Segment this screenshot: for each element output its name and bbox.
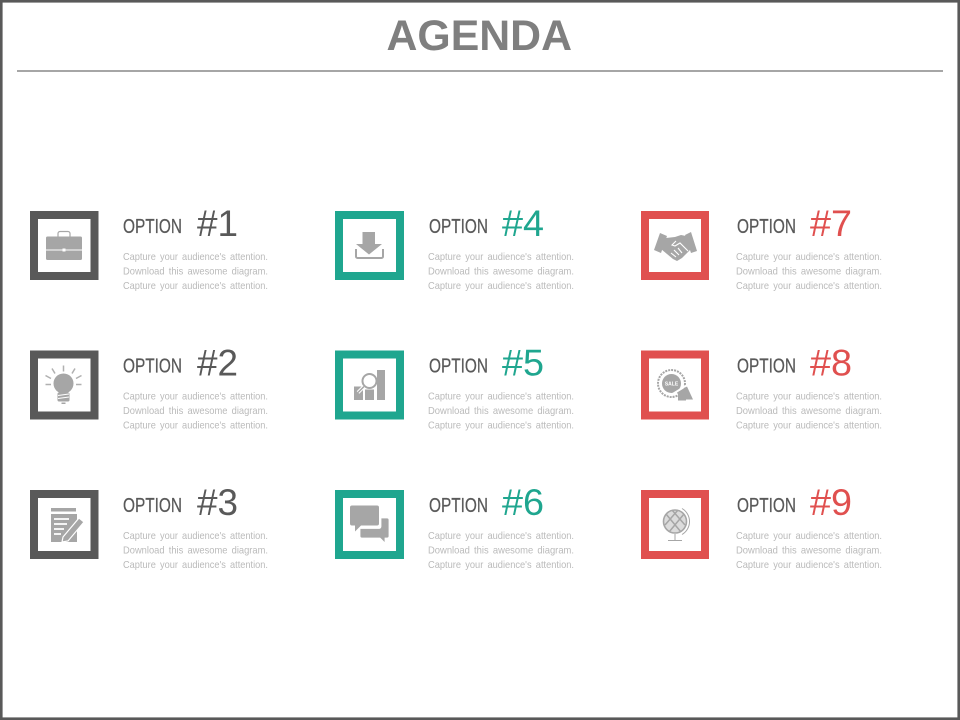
option 1 text: OPTION bbox=[123, 216, 182, 238]
option 8 text: Capture your audience's attention. bbox=[736, 390, 882, 402]
title: AGENDA bbox=[386, 12, 572, 60]
icon: briefcase bbox=[34, 215, 94, 276]
icon: light bulb bbox=[34, 354, 94, 416]
option 4 bbox=[339, 203, 574, 292]
option 7 bbox=[645, 203, 882, 292]
icon: sale badge and hand: SALE bbox=[665, 382, 679, 388]
option 8 text: OPTION bbox=[737, 356, 796, 378]
option 9 text: Download this awesome diagram. bbox=[736, 544, 882, 556]
option 3 text: OPTION bbox=[123, 495, 182, 517]
option 2 bbox=[34, 342, 268, 432]
option 7 text: Download this awesome diagram. bbox=[736, 266, 882, 278]
option 3 text: #3 bbox=[197, 482, 238, 523]
option 6 text bbox=[428, 482, 574, 571]
option 4 text: OPTION bbox=[429, 216, 488, 238]
option 5 text: Download this awesome diagram. bbox=[428, 405, 574, 417]
option 9 text bbox=[736, 482, 882, 571]
option 2 text: OPTION bbox=[123, 356, 182, 378]
option 1 text: Capture your audience's attention. bbox=[123, 280, 268, 292]
option 6 text: Capture your audience's attention. bbox=[428, 559, 574, 571]
option 4 text: #4 bbox=[502, 203, 544, 244]
option 3 text: Capture your audience's attention. bbox=[123, 559, 268, 571]
option 9 text: #9 bbox=[810, 482, 852, 523]
option 9 text: Capture your audience's attention. bbox=[736, 559, 882, 571]
icon: speech bubbles bbox=[339, 494, 400, 555]
option 1 text: Capture your audience's attention. bbox=[123, 251, 268, 263]
option 1 text: #1 bbox=[197, 203, 238, 244]
option 4 text: Download this awesome diagram. bbox=[428, 266, 574, 278]
option 2 text bbox=[123, 342, 268, 432]
option 2 text: Download this awesome diagram. bbox=[123, 405, 268, 417]
option 3 bbox=[34, 482, 268, 571]
icon: desk globe bbox=[645, 494, 705, 555]
option 3 text: Download this awesome diagram. bbox=[123, 544, 268, 556]
option 8 bbox=[645, 342, 882, 432]
option 6 text: OPTION bbox=[429, 495, 488, 517]
option 8 text: Capture your audience's attention. bbox=[736, 420, 882, 432]
option 1 text bbox=[123, 203, 268, 292]
option 5 bbox=[339, 342, 574, 432]
option 2 text: Capture your audience's attention. bbox=[123, 420, 268, 432]
option 5 text: Capture your audience's attention. bbox=[428, 420, 574, 432]
icon: download tray bbox=[339, 215, 400, 276]
option 4 text: Capture your audience's attention. bbox=[428, 280, 574, 292]
option 9 text: Capture your audience's attention. bbox=[736, 530, 882, 542]
option 7 text: Capture your audience's attention. bbox=[736, 251, 882, 263]
option 2 text: Capture your audience's attention. bbox=[123, 390, 268, 402]
icon: handshake bbox=[645, 215, 705, 276]
option 5 text bbox=[428, 342, 574, 432]
option 9 bbox=[645, 482, 882, 571]
option 8 text bbox=[736, 342, 882, 432]
option 7 text: #7 bbox=[810, 203, 852, 244]
option 7 text: OPTION bbox=[737, 216, 796, 238]
option 6 bbox=[339, 482, 574, 571]
icon: notepad and pen bbox=[34, 494, 94, 555]
option 3 text bbox=[123, 482, 268, 571]
option 1 bbox=[34, 203, 268, 292]
option 4 text bbox=[428, 203, 574, 292]
option 9 text: OPTION bbox=[737, 495, 796, 517]
option 6 text: Capture your audience's attention. bbox=[428, 530, 574, 542]
option 8 text: #8 bbox=[810, 342, 852, 384]
option 3 text: Capture your audience's attention. bbox=[123, 530, 268, 542]
option 4 text: Capture your audience's attention. bbox=[428, 251, 574, 263]
option 7 text: Capture your audience's attention. bbox=[736, 280, 882, 292]
icon: sale badge and hand bbox=[645, 354, 705, 416]
option 7 text bbox=[736, 203, 882, 292]
option 6 text: #6 bbox=[502, 482, 544, 523]
option 5 text: OPTION bbox=[429, 356, 488, 378]
option 2 text: #2 bbox=[197, 342, 238, 384]
icon: bar chart with magnifier bbox=[339, 354, 400, 416]
option 5 text: #5 bbox=[502, 342, 544, 384]
option 8 text: Download this awesome diagram. bbox=[736, 405, 882, 417]
option 1 text: Download this awesome diagram. bbox=[123, 266, 268, 278]
option 6 text: Download this awesome diagram. bbox=[428, 544, 574, 556]
option 5 text: Capture your audience's attention. bbox=[428, 390, 574, 402]
